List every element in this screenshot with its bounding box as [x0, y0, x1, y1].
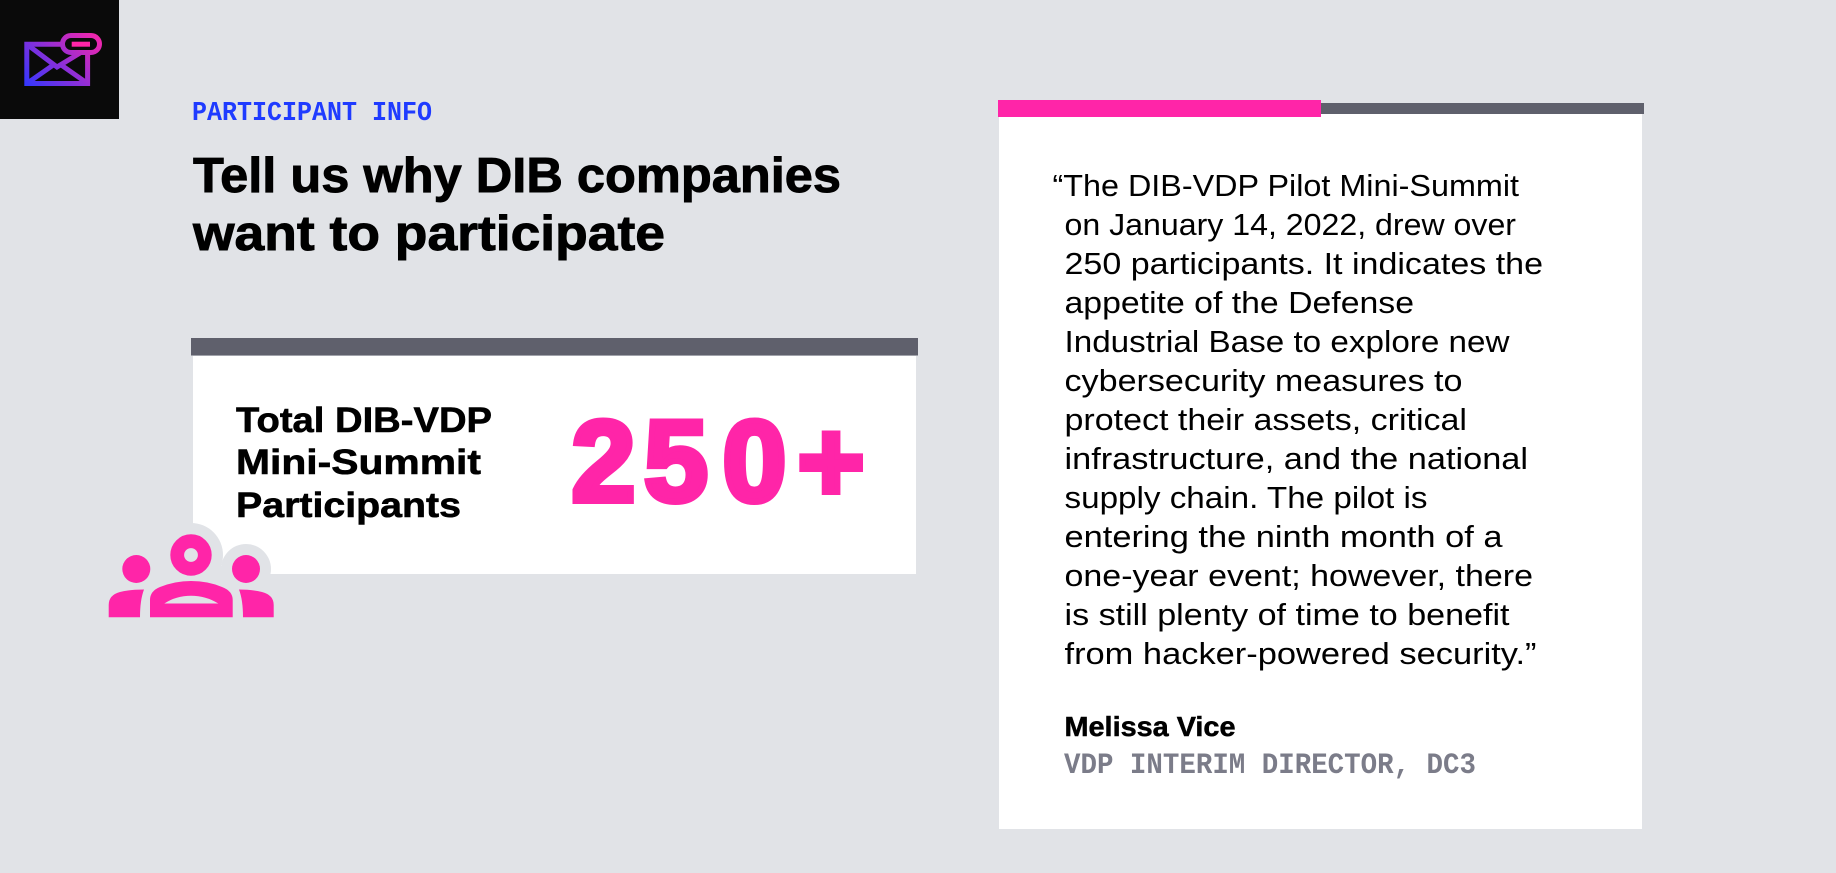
panel: participant total: [191, 338, 918, 574]
quote text: [1052, 168, 1543, 671]
title: want to participate: [192, 207, 665, 261]
stat number: 250+: [572, 398, 865, 526]
attribution role: VDP INTERIM DIRECTOR, DC3: [1064, 749, 1476, 783]
quote text: infrastructure, and the national: [1064, 441, 1528, 476]
eyebrow label: PARTICIPANT INFO: [192, 99, 432, 129]
quote text: 250 participants. It indicates the: [1064, 246, 1543, 281]
quote text: on January 14, 2022, drew over: [1064, 207, 1516, 242]
quote text: appetite of the Defense: [1064, 285, 1414, 320]
quote text: is still plenty of time to benefit: [1064, 597, 1510, 632]
stat label: Participants: [236, 486, 461, 525]
attribution name: Melissa Vice: [1064, 711, 1236, 742]
quote text: one-year event; however, there: [1064, 558, 1533, 593]
quote text: “The DIB-VDP Pilot Mini-Summit: [1052, 168, 1519, 203]
icon: group of people: [109, 523, 274, 617]
stat label: Mini-Summit: [236, 443, 481, 482]
quote text: from hacker-powered security.”: [1064, 636, 1536, 671]
title: Tell us why DIB companies: [193, 149, 841, 203]
title: [192, 149, 841, 261]
logo: envelope icon: [0, 0, 119, 119]
stat label: [236, 401, 492, 525]
quote text: protect their assets, critical: [1064, 402, 1467, 437]
quote text: Industrial Base to explore new: [1064, 324, 1510, 359]
quote text: supply chain. The pilot is: [1064, 480, 1428, 515]
quote text: cybersecurity measures to: [1064, 363, 1462, 398]
panel: quote: [998, 100, 1644, 829]
quote text: entering the ninth month of a: [1064, 519, 1503, 554]
stat label: Total DIB-VDP: [236, 401, 492, 440]
